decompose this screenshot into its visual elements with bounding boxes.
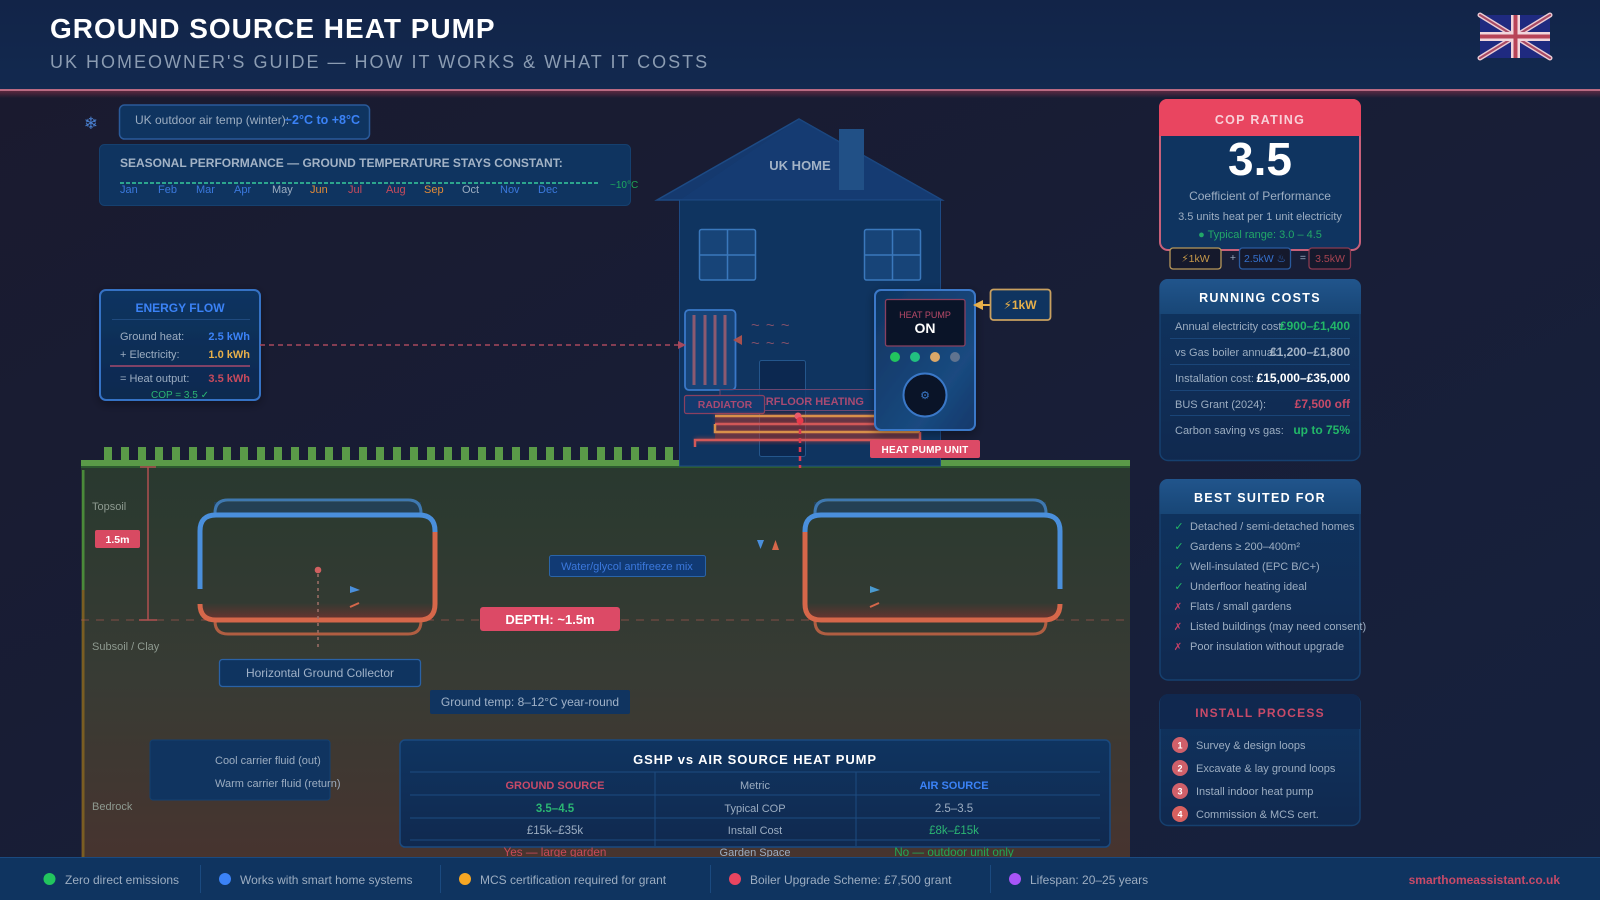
row: annual electricity [1175,319,1350,333]
panel: energy flow: Ground heat: [120,331,184,343]
panel: seasonal performance: Dec [538,184,558,196]
depth reference line [81,619,1130,621]
window left [700,230,756,280]
table row: garden space: Garden Space [720,847,790,859]
depth badge: 1.5m [95,530,140,548]
label: radiator [684,396,764,414]
step 2: 2 [1177,764,1183,774]
panel: seasonal performance: Aug [386,184,406,196]
panel: COP rating: Coefficient of Performance [1189,189,1331,203]
panel: COP rating: 3.5 units heat per 1 unit electricity [1178,211,1342,223]
legend: carrier fluid: Cool carrier fluid (out) [215,755,321,767]
panel: running costs: RUNNING COSTS [1199,291,1321,305]
heat pump unit: ⚙ [920,390,930,402]
label: antifreeze: Water/glycol antifreeze mix [561,561,693,573]
step 1 [1172,737,1306,753]
label: ground temperature: Ground temp: 8–12°C year-round [441,695,619,709]
panel: energy flow: 1.0 kWh [208,349,250,361]
COP equation chips: + [1230,252,1236,264]
label: heat pump unit: HEAT PUMP UNIT [882,445,968,456]
panel: energy flow: + Electricity: [120,349,180,361]
row: gas boiler [1175,345,1350,359]
panel: best suited for: ✓ [1174,581,1184,593]
panel: best suited for: Underfloor heating ideal [1190,581,1307,593]
row: installation: £15,000–£35,000 [1257,371,1350,385]
panel: best suited for: ✗ [1174,602,1182,613]
label: UK home: UK HOME [769,158,831,173]
panel: best suited for: Detached / semi-detached homes [1190,521,1355,533]
soil layers [81,466,1130,858]
window right [864,230,920,280]
title: GROUND SOURCE HEAT PUMP [50,13,496,44]
heat waves [751,317,791,352]
panel: COP rating [1159,99,1361,250]
row: BUS grant: BUS Grant (2024): [1175,399,1266,411]
row: carbon saving: up to 75% [1293,423,1350,437]
panel: energy flow: = Heat output: [120,373,189,385]
COP header [1159,99,1361,136]
panel: best suited for: ✗ [1174,622,1182,633]
step 4: 4 [1177,810,1183,820]
label: topsoil: Topsoil [92,501,126,513]
panel: energy flow: ENERGY FLOW [135,301,225,315]
table row: COP: Typical COP [724,803,786,815]
panel: best suited for: Flats / small gardens [1190,601,1292,613]
panel: seasonal performance: Sep [424,184,444,196]
electricity input arrow [973,300,990,310]
step 3: 3 [1177,786,1183,796]
house body [680,200,940,466]
COP equation chips: = [1300,252,1306,264]
label: underfloor heating [720,390,880,410]
label: bedrock: Bedrock [92,801,133,813]
label: horizontal ground collector: Horizontal Ground Collector [246,666,394,680]
row: gas boiler: vs Gas boiler annual: [1175,347,1278,359]
control dial [904,374,946,416]
icon: snowflake: ❄ [84,114,98,133]
icon: UK flag [1480,15,1550,58]
ground loop: right [805,500,1060,634]
table row: COP: 2.5–3.5 [935,803,973,815]
step 1: 1 [1177,740,1183,750]
panel: seasonal performance: ~10°C [610,180,638,191]
step 4 [1172,806,1319,822]
chip: electricity: ⚡1kW [1181,253,1210,265]
chip: output [1309,248,1350,269]
row: annual electricity: Annual electricity cost: [1175,321,1284,333]
door [760,360,806,456]
row: carbon saving [1175,423,1350,437]
label: 1kW input [990,290,1050,320]
depth ruler [139,467,157,620]
table row: COP: 3.5–4.5 [536,803,575,815]
panel: COP rating: ● Typical range: 3.0 – 4.5 [1198,229,1322,241]
label: radiator: RADIATOR [698,399,753,411]
panel: seasonal performance: Jan [120,184,138,196]
heat waves: ~ ~ ~ [751,317,791,334]
display screen [886,300,965,346]
panel: best suited for: Poor insulation without upgrade [1190,641,1344,653]
table row: garden space: Yes — large garden [504,846,606,859]
row: annual electricity: £900–£1,400 [1280,319,1350,333]
heat pump unit: HEAT PUMP [899,310,951,320]
label: ground temperature [430,690,630,714]
panel: energy flow: 2.5 kWh [208,331,250,343]
panel: seasonal performance: SEASONAL PERFORMANCE — GROUND TEMPERATURE STAYS CONSTANT: [120,156,563,170]
row: installation: Installation cost: [1175,373,1254,385]
label: heat pump unit [870,440,980,458]
COP equation chips [1170,248,1350,269]
panel: best suited for: BEST SUITED FOR [1194,491,1326,505]
panel: best suited for: ✓ [1174,541,1184,553]
table row: install cost [527,825,979,837]
panel: best suited for: Listed buildings (may need consent) [1190,621,1366,633]
label: underfloor heating: UNDERFLOOR HEATING [735,396,864,408]
note: MCS: MCS certification required for grant [480,873,667,887]
panel: seasonal performance: May [272,184,293,196]
row: BUS grant: £7,500 off [1295,397,1351,411]
panel: install process: INSTALL PROCESS [1195,706,1325,720]
callout: outdoor air temperature: UK outdoor air temp (winter): [135,113,289,127]
note: lifespan: Lifespan: 20–25 years [1030,873,1148,887]
flow arrow into radiator [678,341,686,349]
ground loop: left [200,500,435,651]
chip: electricity [1170,248,1221,269]
panel: best suited for: ✓ [1174,561,1184,573]
table header row: GROUND SOURCE [505,780,605,792]
panel: install process [1160,694,1360,826]
ground surface and grass [81,447,1130,468]
step 3 [1172,783,1313,799]
note: boiler upgrade: Boiler Upgrade Scheme: £7,500 grant [750,873,952,887]
legend: carrier fluid: Warm carrier fluid (return) [215,778,340,790]
step 4: Commission & MCS cert. [1196,809,1319,821]
table header row [505,780,989,792]
panel: comparison table: GSHP vs AIR SOURCE HEAT PUMP [633,752,877,767]
table row: install cost: Install Cost [728,825,782,837]
table row: install cost: £15k–£35k [527,825,583,837]
heat pump unit: ON [914,320,936,336]
label: 1kW input: ⚡1kW [1003,298,1037,312]
panel: seasonal performance [100,144,638,206]
panel: seasonal performance: Apr [234,184,251,196]
panel: running costs [1160,279,1361,460]
table row: garden space [504,846,1014,859]
panel: best suited for: ✓ [1174,521,1184,533]
flow pipe into house [794,412,804,468]
underfloor heating pipes [695,416,920,447]
panel: energy flow: COP = 3.5 ✓ [151,390,209,401]
step 1: Survey & design loops [1196,740,1306,752]
table row: install cost: £8k–£15k [929,825,979,837]
subtitle: UK HOMEOWNER'S GUIDE — HOW IT WORKS & WHAT IT COSTS [50,52,709,72]
row: installation [1175,371,1350,385]
step 2: Excavate & lay ground loops [1196,763,1336,775]
chip: ground [1240,248,1290,269]
row: gas boiler: £1,200–£1,800 [1270,345,1350,359]
panel: energy flow: 3.5 kWh [208,373,250,385]
row: BUS grant [1175,397,1351,411]
row: carbon saving: Carbon saving vs gas: [1175,425,1284,437]
flow line: heat to house [260,344,680,346]
label: depth: DEPTH: ~1.5m [505,612,595,627]
panel: best suited for: ✗ [1174,642,1182,653]
panel: seasonal performance: Mar [196,184,215,196]
panel: best suited for [1160,479,1366,680]
table header row: Metric [740,780,770,792]
legend: carrier fluid [150,740,340,800]
panel: seasonal performance: Nov [500,184,520,196]
status lights [890,352,960,362]
table row: garden space: No — outdoor unit only [894,846,1014,859]
panel: comparison table [400,740,1110,859]
callout: outdoor air temperature [120,105,370,139]
table header row: AIR SOURCE [919,780,989,792]
heat waves: ~ ~ ~ [751,335,791,352]
footer bar [0,857,1600,900]
label: subsoil: Subsoil / Clay [92,641,160,653]
step 2 [1172,760,1336,776]
panel: best suited for: Well-insulated (EPC B/C+) [1190,561,1320,573]
panel: seasonal performance: Jul [348,184,362,196]
panel: COP rating: COP RATING [1215,113,1305,127]
panel: energy flow [100,290,260,401]
step 3: Install indoor heat pump [1196,786,1313,798]
radiator [685,310,736,396]
label: depth [480,607,620,631]
label: horizontal ground collector [220,660,420,686]
depth badge: 1.5m: 1.5m [106,534,129,546]
chip: ground: 2.5kW ♨ [1244,253,1286,265]
table row: COP [536,803,973,815]
return arrow from radiator [733,335,742,345]
COP value: 3.5 [1228,133,1292,185]
heat pump unit [875,290,975,430]
note: zero emissions: Zero direct emissions [65,873,179,887]
panel: seasonal performance: Jun [310,184,328,196]
header bar [0,0,1600,98]
panel: seasonal performance: Oct [462,184,479,196]
label: antifreeze [550,556,706,576]
panel: seasonal performance: Feb [158,184,177,196]
chimney [839,129,864,190]
callout: outdoor air temperature: −2°C to +8°C [285,113,360,127]
website: smarthomeassistant.co.uk [1409,873,1560,887]
house [657,119,942,466]
chip: output: 3.5kW [1315,253,1345,265]
panel: best suited for: Gardens ≥ 200–400m² [1190,541,1300,553]
roof [657,119,942,200]
flow arrows [757,540,779,550]
note: smart home: Works with smart home systems [240,873,412,887]
